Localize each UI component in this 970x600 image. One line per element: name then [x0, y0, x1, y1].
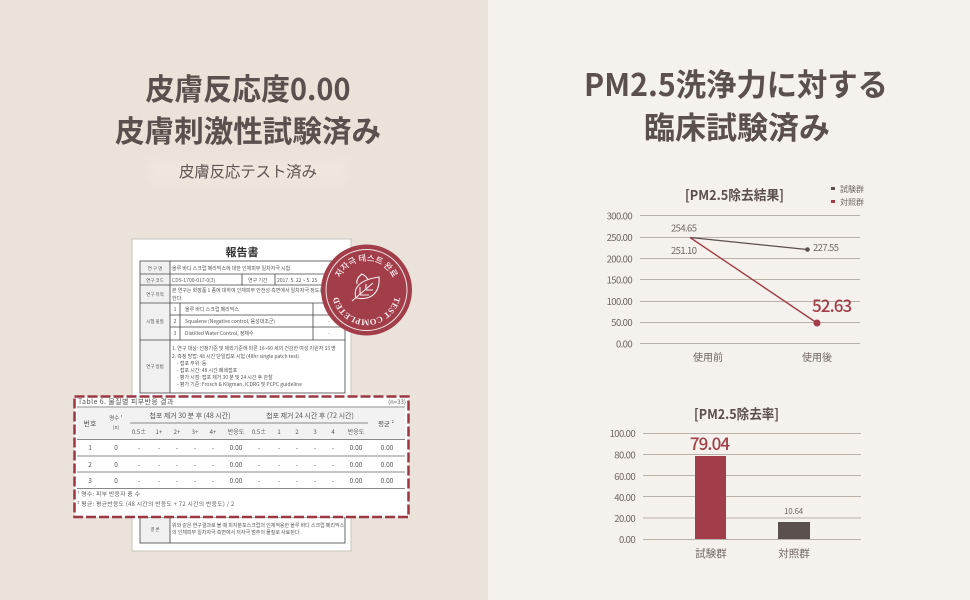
y axis labels: 0.00 — [616, 336, 632, 350]
document table: 2017. 5. 22 ~ 5. 25 — [277, 277, 318, 284]
result row 2: - — [176, 459, 178, 469]
document table: 연구 기간 — [248, 277, 268, 284]
highlighted results table: 평균 ² — [378, 418, 394, 428]
series: control group: 251.10 — [671, 243, 697, 257]
document table: 연 구 명 — [148, 265, 162, 272]
highlighted results table: 0.5± — [132, 427, 146, 436]
table footnotes: ¹ 명수: 피부 반응자 총 수 — [77, 489, 141, 498]
y axis labels — [610, 426, 635, 546]
y axis labels: 100.00 — [610, 426, 635, 440]
chart heading: [PM2.5除去結果] — [685, 184, 784, 204]
result row 3: - — [138, 475, 140, 485]
highlighted results table: 2 — [295, 427, 299, 436]
legend: 試験群 — [840, 184, 864, 195]
result row 1: - — [296, 442, 298, 452]
title: skin reaction: 皮膚反応度0.00 — [146, 65, 350, 109]
document table: 올루 바디 스크럽 페리믹스에 대한 인체피부 일차자극 시험 — [172, 265, 290, 272]
x axis labels: 使用前 — [693, 349, 723, 364]
subtitle with soft pill — [148, 159, 348, 183]
result row 1: 1 — [88, 442, 92, 452]
highlighted results table: 첩포 제거 24 시간 후 (72 시간) — [266, 411, 354, 421]
y axis labels: 20.00 — [614, 511, 635, 525]
x axis labels — [693, 349, 832, 364]
bar: test group: 79.04 — [690, 430, 730, 455]
result row 3: 0.00 — [350, 475, 363, 485]
document table: - — [328, 318, 330, 325]
conclusion row — [140, 517, 345, 543]
document table: 1 — [174, 306, 177, 313]
x axis labels: 試験群 — [695, 546, 727, 561]
result row 3: - — [212, 475, 214, 485]
document table: Squalene (Negative control, 음성대조군) — [185, 318, 276, 325]
document table — [140, 261, 345, 393]
document table: 본 연구는 화장품 1 종에 대하여 인체피부 안전성 측면에서 일차자극 정도를 — [172, 287, 324, 294]
bar: control group — [778, 506, 810, 539]
subtitle with soft pill: 皮膚反応テスト済み — [179, 160, 317, 182]
highlighted results table: Table 6. 물질별 피부반응 결과 — [78, 397, 174, 407]
result row 1: - — [158, 442, 160, 452]
highlighted results table: 반응도 — [348, 427, 365, 436]
document table: Distilled Water Control, 정제수 — [185, 330, 254, 337]
highlighted results table: 4+ — [210, 427, 217, 436]
title: PM2.5 cleansing: PM2.5洗浄力に対する — [584, 60, 888, 105]
y axis labels — [607, 208, 632, 350]
result row 3: - — [194, 475, 196, 485]
highlighted results table: (n) — [113, 424, 120, 431]
x axis labels: 使用後 — [802, 349, 832, 364]
legend — [831, 184, 864, 208]
result row 3: 3 — [88, 475, 92, 485]
result row 1: - — [176, 442, 178, 452]
result row 1: - — [194, 442, 196, 452]
y axis labels: 40.00 — [614, 490, 635, 504]
panel: left background — [0, 0, 488, 600]
y axis labels: 60.00 — [614, 469, 635, 483]
document table: 3 — [174, 330, 177, 337]
result row 2: 0.00 — [230, 459, 243, 469]
stamp: test completed: TEST COMPLETED — [333, 298, 400, 326]
stamp: test completed: 저자극 테스트 완료 — [334, 254, 398, 278]
y axis labels: 300.00 — [607, 208, 632, 222]
legend: 対照群 — [840, 197, 864, 208]
highlighted results table: 반응도 — [228, 427, 245, 436]
stamp: test completed — [321, 244, 412, 336]
series: control group: 52.63 — [812, 292, 852, 317]
document title: 報告書 — [226, 244, 258, 260]
result row 2: - — [278, 459, 280, 469]
bar: control group: 10.64 — [784, 506, 804, 517]
result row 2: - — [194, 459, 196, 469]
series: test group: 227.55 — [813, 240, 839, 254]
result row 2: 0.00 — [350, 459, 363, 469]
result row 1: 0.00 — [350, 442, 363, 452]
document table: 2 — [174, 318, 177, 325]
result row 2: - — [258, 459, 260, 469]
title: skin reaction — [115, 65, 381, 151]
table footnotes — [77, 489, 234, 508]
document table: 2. 측정 방법: 48 시간 단일접포 시험 (48hr single patch test) — [172, 353, 299, 360]
bar chart: PM2.5 removal rate — [610, 403, 861, 561]
result row 1: - — [278, 442, 280, 452]
document table: - 접포 시간: 48 시간 폐쇄접포 — [177, 367, 238, 374]
result row 2: - — [332, 459, 334, 469]
highlighted results table: (n=33) — [388, 397, 406, 406]
title: PM2.5 cleansing: 臨床試験済み — [644, 103, 830, 148]
result row 1: - — [138, 442, 140, 452]
series: control group — [671, 238, 852, 326]
bar: test group — [690, 430, 730, 539]
result row 3: - — [296, 475, 298, 485]
series: test group — [671, 220, 839, 254]
highlighted results table: 1+ — [156, 427, 163, 436]
result row 3: - — [258, 475, 260, 485]
result row 2: 0.00 — [381, 459, 394, 469]
result row 3: - — [158, 475, 160, 485]
highlighted results table: 0.5± — [252, 427, 266, 436]
document table: 올루 바디 스크럽 페리믹스 — [185, 306, 239, 313]
y axis labels: 100.00 — [607, 294, 632, 308]
result row 3: 0.00 — [381, 475, 394, 485]
x axis labels: 対照群 — [778, 546, 810, 561]
result row 3: - — [332, 475, 334, 485]
y axis labels: 200.00 — [607, 252, 632, 266]
series: test group: 254.65 — [671, 220, 697, 234]
highlighted results table: 3 — [313, 427, 317, 436]
conclusion row: 위와 같은 연구결과로 볼 때 피지분포스크럽의 인체적용한 올루 바디 스크럽 페리믹스 — [172, 522, 345, 529]
highlighted results table: 4 — [331, 427, 335, 436]
line chart: PM2.5 removal result — [607, 184, 864, 364]
result row 1: 0.00 — [230, 442, 243, 452]
y axis labels: 50.00 — [611, 315, 632, 329]
chart heading: [PM2.5除去率] — [694, 403, 779, 423]
y axis labels: 150.00 — [607, 272, 632, 286]
document table: - — [328, 330, 330, 337]
highlighted results table: 번호 — [84, 419, 97, 429]
result row 1: 0.00 — [381, 442, 394, 452]
x axis labels — [695, 546, 810, 561]
panel: right background — [488, 0, 970, 600]
document table: 연구 목적 — [146, 291, 164, 298]
document table: 연구 방법 — [146, 363, 164, 370]
title: skin reaction: 皮膚刺激性試験済み — [115, 107, 381, 151]
document table: 시험 물질 — [146, 318, 164, 325]
result row 2: 0 — [114, 459, 118, 469]
document table: 한다. — [172, 295, 183, 302]
result row 1: 0 — [114, 442, 118, 452]
y axis labels: 250.00 — [607, 230, 632, 244]
highlighted results table: 3+ — [192, 427, 199, 436]
highlighted results table — [74, 396, 408, 517]
result row 3: - — [314, 475, 316, 485]
document table: 연구 코드 — [146, 277, 164, 284]
conclusion row: 결 론 — [150, 526, 160, 533]
result row 2: - — [138, 459, 140, 469]
document table: - 접포 부위: 등 — [177, 360, 207, 367]
result row 3: - — [278, 475, 280, 485]
document table: 1. 연구 대상: 선정기준 및 제외기준에 따른 16~60 세의 건강한 여성 지원자 33 명 — [172, 345, 336, 352]
result row 3: - — [176, 475, 178, 485]
highlighted results table: 첩포 제거 30 분 후 (48 시간) — [149, 411, 231, 421]
conclusion row: 의 인체피부 일차자극 측면에서 저자극 범주의 물질로 사료된다. — [172, 529, 301, 536]
document table: - 평가 시점: 접포 제거 30 분 및 24 시간 후 관찰 — [177, 374, 273, 381]
highlighted results table: 2+ — [174, 427, 181, 436]
result row 3: 0.00 — [230, 475, 243, 485]
result row 2: 2 — [88, 459, 92, 469]
result row 1: - — [212, 442, 214, 452]
result row 1: - — [258, 442, 260, 452]
title: PM2.5 cleansing — [584, 60, 888, 148]
result row 2: - — [158, 459, 160, 469]
y axis labels: 0.00 — [619, 532, 635, 546]
report document — [132, 239, 351, 551]
highlighted results table: 명수 ¹ — [109, 414, 123, 422]
result row 2: - — [314, 459, 316, 469]
result row 1: - — [314, 442, 316, 452]
result row 2: - — [296, 459, 298, 469]
result row 1: - — [332, 442, 334, 452]
result row 3: 0 — [114, 475, 118, 485]
document table: CDS-1700-017-0(3) — [172, 277, 216, 284]
highlighted results table: 1 — [277, 427, 281, 436]
icon: leaf — [352, 274, 379, 301]
y axis labels: 80.00 — [614, 448, 635, 462]
document table: - 평가 기준: Frosch & Kligman, ICDRG 및 PCPC guideline — [177, 381, 302, 388]
table footnotes: ² 평균: 평균반응도 (48 시간의 반응도 + 72 시간의 반응도) / 2 — [77, 499, 234, 508]
result row 2: - — [212, 459, 214, 469]
